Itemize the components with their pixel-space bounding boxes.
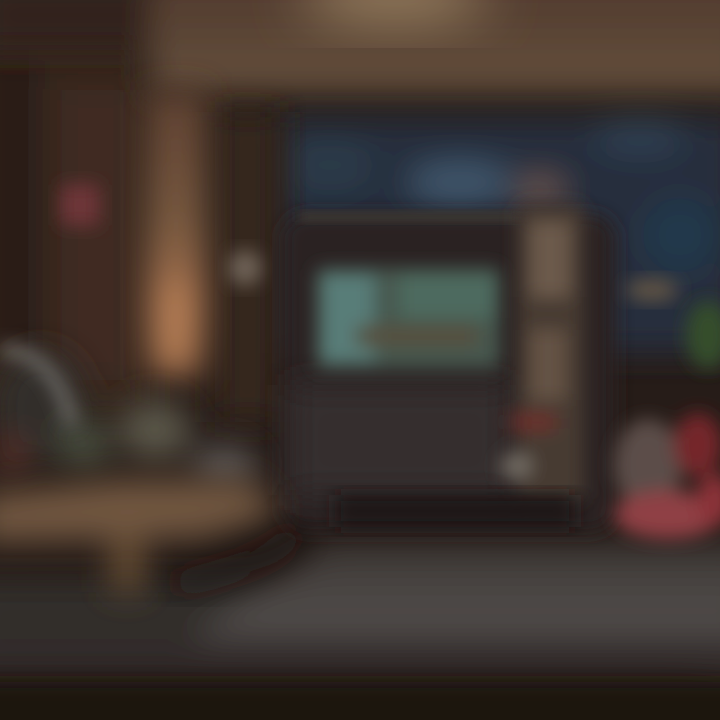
panel: wooden left wall — [0, 0, 150, 420]
icon: green plant — [686, 301, 720, 369]
faucet highlight — [0, 350, 72, 425]
panel: gray counter — [0, 545, 720, 680]
microwave screen — [316, 268, 500, 368]
dark cable on counter — [170, 530, 300, 585]
light object on shelf at right — [626, 278, 678, 302]
panel: glowing wooden pillar — [145, 92, 207, 380]
icon: red wall sign — [60, 184, 100, 226]
panel: red fruits — [614, 413, 720, 539]
panel: wooden ceiling beam — [0, 0, 720, 110]
panel: left faucet and greens — [0, 350, 257, 485]
microwave control panel — [500, 205, 584, 500]
microwave lower panel — [290, 385, 510, 495]
microwave top edge highlight — [300, 212, 520, 222]
panel: wooden wall behind microwave — [215, 112, 280, 422]
ceiling light glow — [300, 0, 490, 22]
panel: blue window backdrop — [280, 117, 720, 353]
small lit object beside microwave — [228, 250, 262, 286]
microwave body — [282, 214, 616, 532]
panel: wooden cutting board — [0, 480, 280, 592]
microwave — [282, 205, 616, 532]
microwave dark base — [335, 495, 575, 527]
panel: counter front edge — [0, 682, 720, 720]
